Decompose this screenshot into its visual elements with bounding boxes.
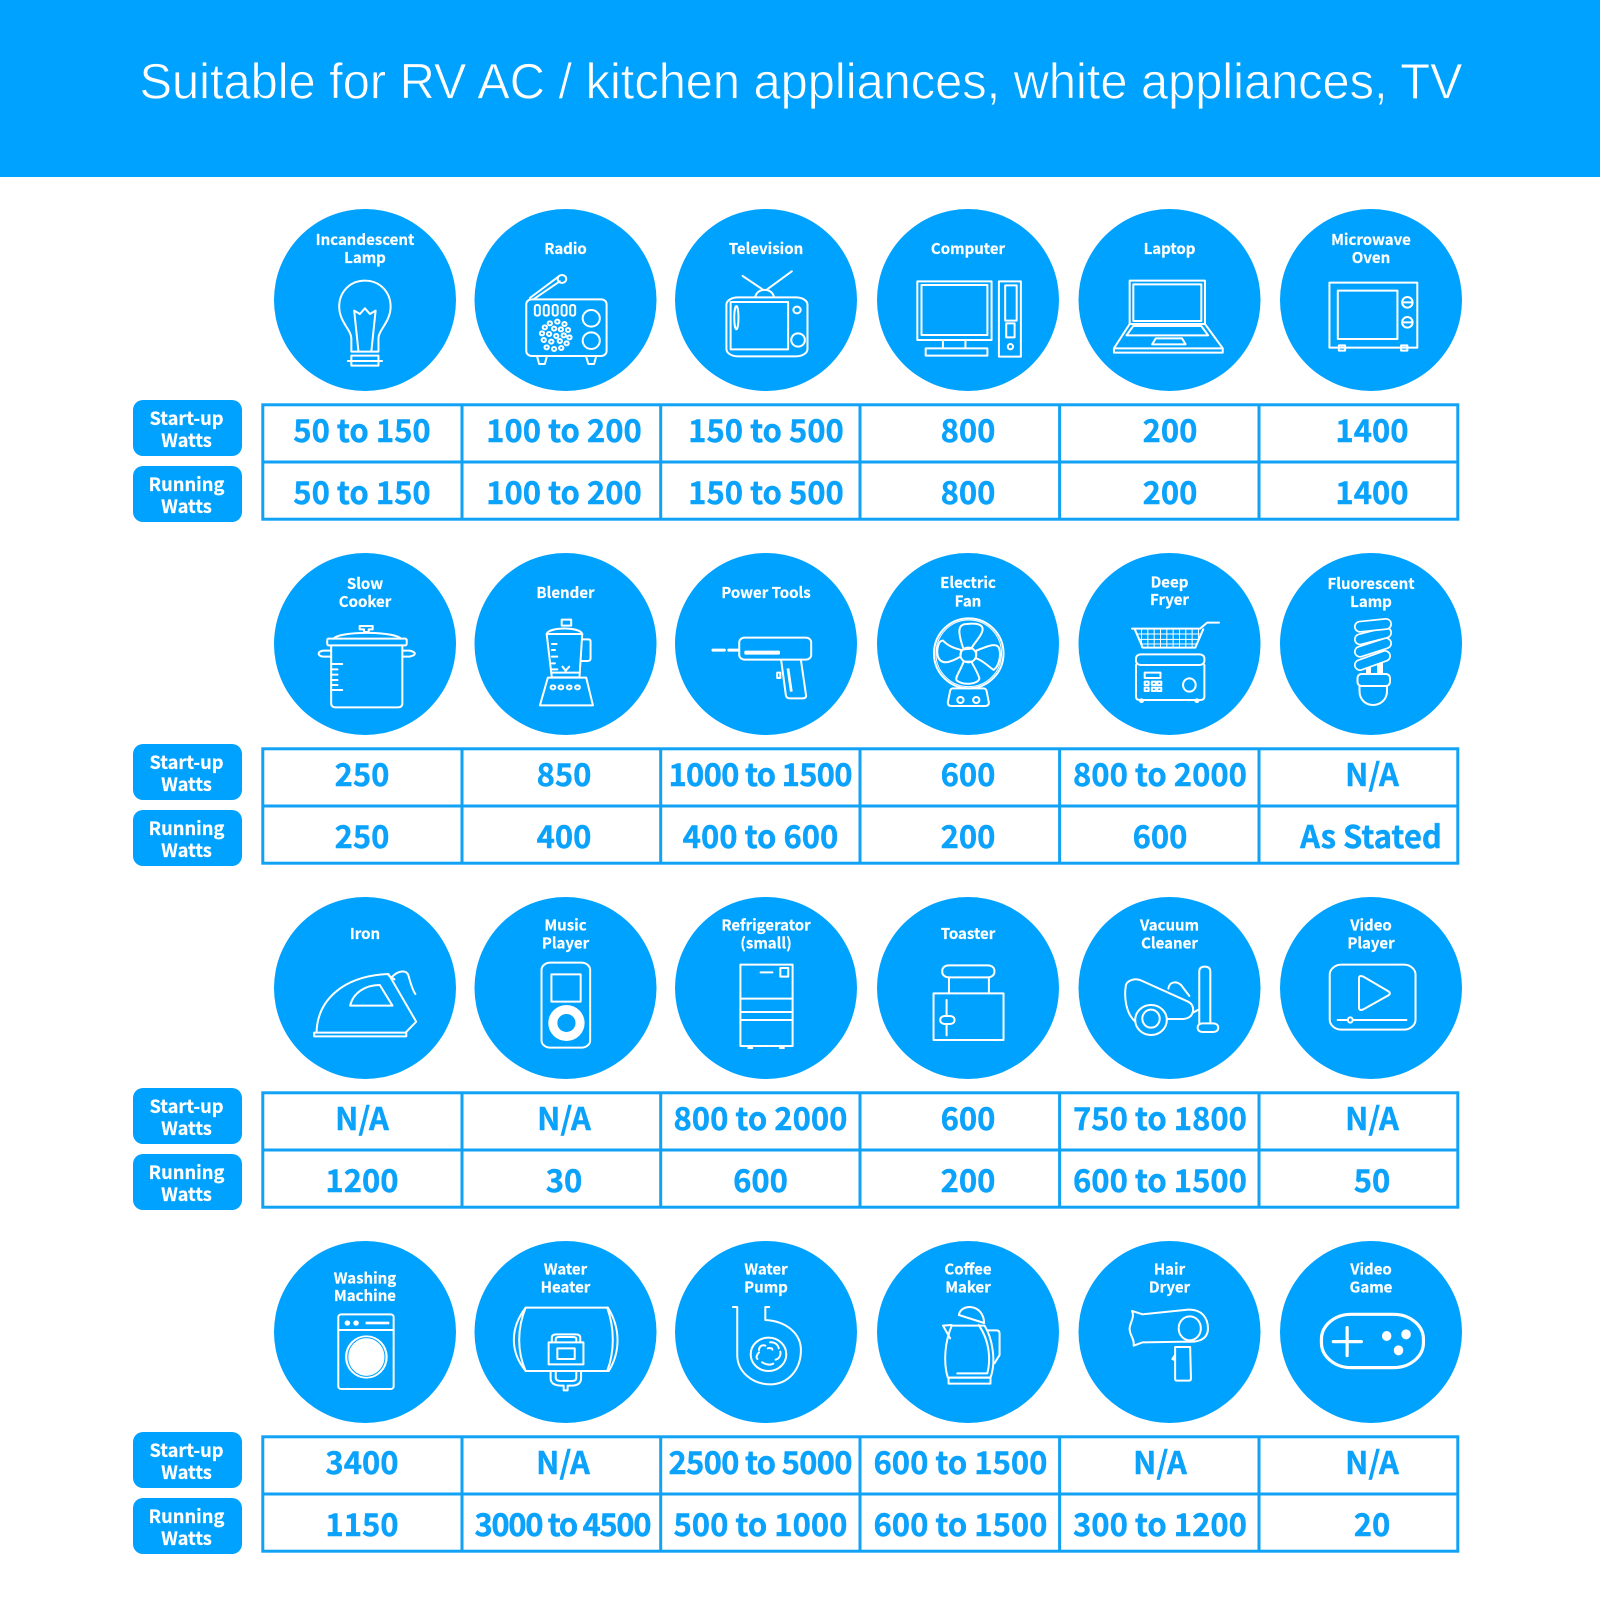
icon: light bulb [339,281,391,366]
table: row 3 watts: 600 to 1500 [1073,1156,1247,1201]
appliance: Television [675,209,857,391]
table: row 1 watts [262,405,1458,519]
appliance: Microwave Oven: Microwave [1331,229,1411,250]
table: row 3 watts: 200 [941,1156,995,1201]
table: row 2 watts: N/A [1345,750,1399,795]
icon: vacuum cleaner [1125,967,1218,1035]
appliance: Coffee Maker [877,1241,1059,1423]
icon: hair dryer [1130,1310,1208,1381]
appliance: Television: Television [729,238,803,259]
badge: Running Watts [133,810,242,866]
table: row 1 watts: 100 to 200 [486,468,642,513]
appliance: Video Player: Player [1347,932,1395,954]
appliance: Radio [474,209,656,391]
appliance: Toaster: Toaster [941,923,996,944]
appliance: Music Player: Music [544,914,587,936]
row 3 [133,897,1462,1210]
icon: clothes iron [314,971,416,1036]
appliance: Washing Machine: Washing [334,1268,396,1288]
appliance: Coffee Maker: Coffee [944,1258,992,1280]
icon: deep fryer [1132,623,1219,702]
table: row 4 watts: 3400 [325,1438,399,1483]
badge: Start-up Watts: Watts [161,1115,212,1141]
table: row 3 watts: 30 [546,1156,582,1201]
appliance: Radio: Radio [544,238,587,259]
badge: Start-up Watts [133,744,242,800]
table: row 2 watts: 250 [335,812,389,857]
badge: Running Watts [133,1154,242,1210]
table: row 2 watts: As Stated [1299,812,1442,857]
appliance: Computer: Computer [931,238,1006,259]
table: row 1 watts: 1400 [1335,468,1409,513]
appliance: Water Pump [675,1241,857,1423]
appliance: Toaster [877,897,1059,1079]
icon: television [726,271,807,356]
appliance: Microwave Oven: Oven [1352,247,1390,268]
table: row 4 watts: N/A [1345,1438,1399,1483]
table: row 4 watts: 2500 to 5000 [668,1438,852,1483]
icon: music player [542,963,590,1048]
badge: Running Watts: Running [149,1159,224,1185]
appliance: Computer [877,209,1059,391]
table: row 1 watts: 200 [1143,468,1197,513]
icon: spiral lamp [1358,624,1390,705]
appliance: Water Pump: Pump [744,1276,788,1298]
table: row 2 watts: 600 [1133,812,1187,857]
row 1 [133,209,1462,522]
appliance: Incandescent Lamp [274,209,456,391]
appliance: Blender [474,553,656,735]
appliance: Refrigerator (small): Refrigerator [721,914,811,936]
icon: water pump [733,1307,801,1384]
badge: Running Watts [133,1498,242,1554]
table: row 1 watts: 100 to 200 [486,406,642,451]
table: row 1 watts: 150 to 500 [688,468,844,513]
appliance: Microwave Oven [1280,209,1462,391]
table: row 3 watts: 800 to 2000 [674,1094,847,1139]
appliance: Deep Fryer: Deep [1151,572,1188,592]
row 4 [133,1241,1462,1554]
badge: Start-up Watts [133,400,242,456]
table: row 3 watts: 50 [1354,1156,1390,1201]
badge: Start-up Watts: Watts [161,771,212,797]
table: row 1 watts: 1400 [1335,406,1409,451]
badge: Start-up Watts: Watts [161,427,212,453]
icon: water heater [514,1308,618,1390]
appliance: Electric Fan [877,553,1059,735]
table: row 1 watts: 50 to 150 [293,406,431,451]
appliance: Music Player [474,897,656,1079]
appliance: Hair Dryer: Hair [1154,1258,1186,1280]
appliance: Fluorescent Lamp: Lamp [1350,591,1392,612]
appliance: Fluorescent Lamp [1280,553,1462,735]
table: row 2 watts: 400 [537,812,591,857]
appliance: Video Game [1280,1241,1462,1423]
table: row 4 watts: N/A [1133,1438,1187,1483]
table: row 3 watts: 600 [941,1094,995,1139]
appliance: Electric Fan: Electric [940,572,996,593]
table: row 4 watts: 20 [1354,1500,1390,1545]
icon: refrigerator [740,965,793,1049]
appliance: Washing Machine: Machine [334,1285,396,1306]
badge: Start-up Watts [133,1432,242,1488]
table: row 1 watts: 50 to 150 [293,468,431,513]
badge: Running Watts: Watts [161,493,212,519]
table: row 3 watts: 1200 [325,1156,399,1201]
row 2 [133,553,1462,866]
table: row 4 watts: N/A [536,1438,590,1483]
table: row 1 watts: 800 [941,468,995,513]
appliance: Video Game: Video [1349,1258,1392,1280]
badge: Running Watts: Watts [161,837,212,863]
table: row 1 watts: 200 [1143,406,1197,451]
icon: fan [934,618,1004,706]
appliance: Iron [274,897,456,1079]
table: row 2 watts: 200 [941,812,995,857]
appliance: Power Tools: Power Tools [721,582,811,603]
badge: Start-up Watts: Start-up [149,749,224,775]
icon: washing machine [338,1314,394,1389]
appliance: Deep Fryer: Fryer [1150,589,1189,610]
icon: radio [526,275,607,364]
appliance: Slow Cooker: Cooker [339,591,392,612]
table: row 1 watts: 800 [941,406,995,451]
appliance: Slow Cooker: Slow [347,573,383,594]
icon: laptop [1114,281,1223,353]
table: row 2 watts: 250 [335,750,389,795]
appliance: Vacuum Cleaner: Cleaner [1141,932,1198,954]
appliance: Iron: Iron [350,923,380,944]
appliance: Refrigerator (small) [675,897,857,1079]
appliance: Electric Fan: Fan [955,590,981,612]
badge: Start-up Watts: Start-up [149,1437,224,1463]
appliance: Deep Fryer [1078,553,1260,735]
table: row 3 watts: N/A [1345,1094,1399,1139]
table: row 3 watts: N/A [335,1094,389,1139]
icon: kettle [943,1307,1000,1384]
appliance: Video Game: Game [1350,1276,1393,1298]
icon: desktop computer [917,281,1021,357]
table: row 4 watts: 3000 to 4500 [474,1500,652,1545]
table: row 2 watts: 600 [941,750,995,795]
table: row 2 watts: 400 to 600 [683,812,838,857]
table: row 2 watts: 800 to 2000 [1073,750,1247,795]
appliance: Blender: Blender [536,582,595,603]
appliance: Hair Dryer [1078,1241,1260,1423]
appliance: Power Tools [675,553,857,735]
appliance: Water Heater [474,1241,656,1423]
badge: Running Watts: Running [149,471,224,497]
badge: Running Watts: Running [149,1503,224,1529]
table: row 3 watts [262,1093,1458,1207]
appliance: Incandescent Lamp: Lamp [344,247,386,268]
appliance: Coffee Maker: Maker [945,1276,991,1298]
table: row 4 watts: 600 to 1500 [874,1500,1047,1545]
table: row 2 watts [262,749,1458,863]
icon: toaster [934,965,1004,1040]
appliance: Video Player: Video [1349,914,1392,936]
icon: cooking pot [319,626,415,707]
appliance: Video Player [1280,897,1462,1079]
icon: microwave [1329,283,1417,351]
table: row 2 watts: 850 [537,750,591,795]
badge: Running Watts [133,466,242,522]
appliance: Water Heater: Heater [541,1276,591,1298]
appliance: Refrigerator (small): (small) [740,932,792,954]
appliance: Fluorescent Lamp: Fluorescent [1327,573,1415,594]
title: Suitable for RV AC / kitchen appliances, white appliances, TV [140,52,1463,110]
badge: Start-up Watts: Start-up [149,405,224,431]
header banner [0,0,1600,177]
badge: Start-up Watts [133,1088,242,1144]
table: row 3 watts: 600 [733,1156,788,1201]
table: row 4 watts: 1150 [325,1500,399,1545]
icon: drill [712,638,811,698]
table: row 4 watts [262,1437,1458,1551]
appliance: Incandescent Lamp: Incandescent [316,229,415,250]
appliance: Vacuum Cleaner: Vacuum [1139,914,1199,936]
badge: Running Watts: Watts [161,1181,212,1207]
appliance: Slow Cooker [274,553,456,735]
badge: Start-up Watts: Watts [161,1459,212,1485]
table: row 4 watts: 600 to 1500 [874,1438,1047,1483]
appliance: Music Player: Player [542,932,590,954]
badge: Running Watts: Watts [161,1525,212,1551]
icon: video player [1330,965,1416,1030]
badge: Start-up Watts: Start-up [149,1093,224,1119]
table: row 4 watts: 500 to 1000 [674,1500,847,1545]
icon: game controller [1321,1314,1423,1368]
icon: blender [540,620,593,705]
appliance: Vacuum Cleaner [1078,897,1260,1079]
appliance: Water Pump: Water [744,1258,788,1280]
appliance: Washing Machine [274,1241,456,1423]
appliance: Laptop: Laptop [1144,238,1195,259]
table: row 4 watts: 300 to 1200 [1073,1500,1247,1545]
appliance: Hair Dryer: Dryer [1149,1276,1191,1298]
appliance: Water Heater: Water [544,1258,588,1280]
appliance: Laptop [1078,209,1260,391]
table: row 1 watts: 150 to 500 [688,406,844,451]
table: row 2 watts: 1000 to 1500 [668,750,852,795]
table: row 3 watts: 750 to 1800 [1073,1094,1247,1139]
badge: Running Watts: Running [149,815,224,841]
table: row 3 watts: N/A [537,1094,591,1139]
